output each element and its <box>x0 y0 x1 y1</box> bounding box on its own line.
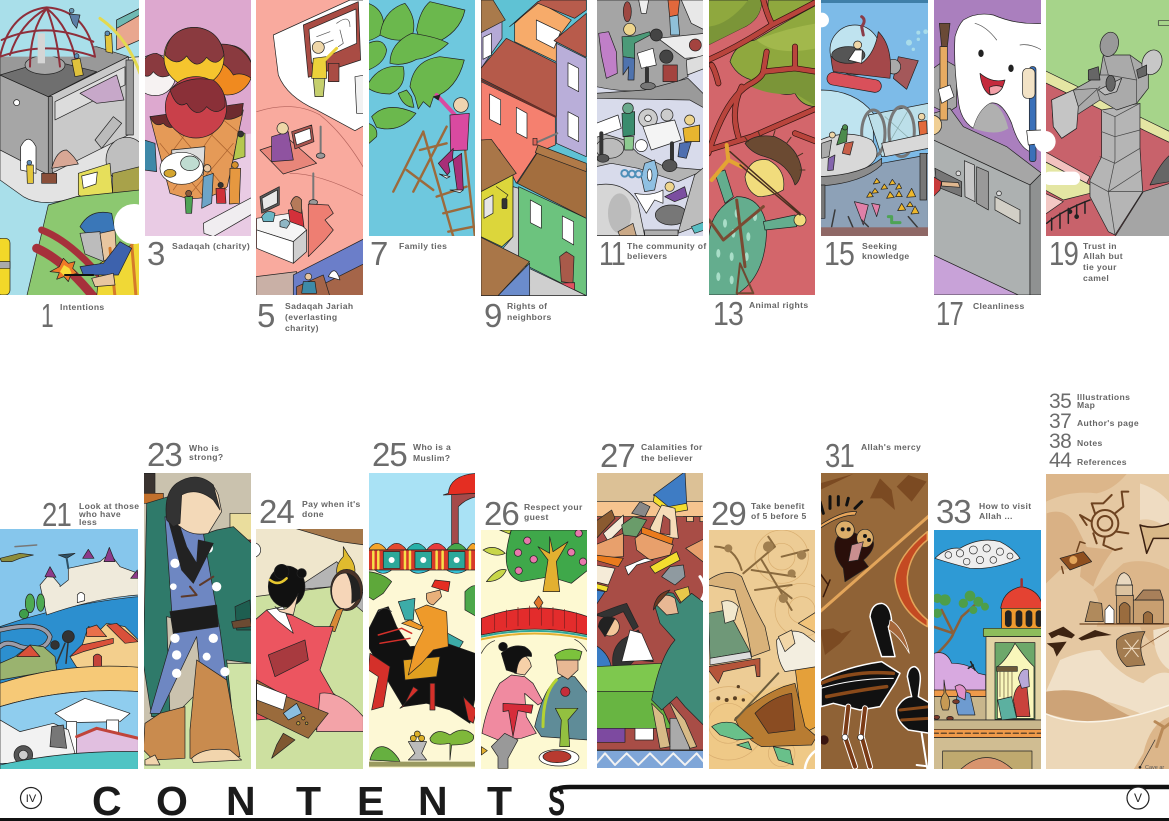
label: Respect your <box>524 502 583 512</box>
caption on map: Cave ar <box>1145 765 1164 771</box>
label: Illustrations <box>1077 392 1130 402</box>
panel: 11 The community of believers <box>596 0 707 272</box>
label: Who is <box>189 443 219 453</box>
panel: 24 Pay when it's done <box>246 493 365 770</box>
page number 21: 21 <box>42 496 71 533</box>
illustration: colourful houses <box>481 0 587 296</box>
label: How to visit <box>979 501 1031 511</box>
illustration: Mughal horseman <box>369 473 475 768</box>
bottom edge line <box>0 818 1169 821</box>
label: camel <box>1083 273 1109 283</box>
page number 23: 23 <box>147 436 182 473</box>
panel: 27 Calamities for the believer <box>595 437 705 770</box>
panel: 17 Cleanliness <box>922 0 1056 332</box>
panel: 23 Who is strong? <box>143 436 252 770</box>
label: Allah ... <box>979 511 1013 521</box>
label: The community of <box>627 241 707 251</box>
panel: 35 Illustrations map <box>1040 390 1169 771</box>
page number 19: 19 <box>1049 235 1078 272</box>
label: Allah but <box>1083 251 1123 261</box>
panel: 19 Trust in Allah but tie your camel <box>1034 0 1169 283</box>
label: Author's page <box>1077 418 1139 428</box>
label: Take benefit <box>751 501 805 511</box>
illustration: robotic camel statue <box>1046 0 1169 236</box>
page number 38: 38 <box>1049 430 1071 453</box>
page number 11: 11 <box>599 235 625 272</box>
label: Seeking <box>862 241 897 251</box>
label: Who is a <box>413 442 451 452</box>
panel: 5 Sadaqah Jariah <box>256 0 365 334</box>
label: Sadaqah (charity) <box>172 241 250 251</box>
page number 25: 25 <box>372 436 407 473</box>
label: believers <box>627 251 667 261</box>
label: who have <box>78 509 121 519</box>
label: Map <box>1077 400 1095 410</box>
page number 26: 26 <box>484 495 519 532</box>
illustration: seated couple under red awning <box>481 530 587 769</box>
label: neighbors <box>507 312 552 322</box>
page number 3: 3 <box>147 235 164 272</box>
page number 44: 44 <box>1049 449 1072 472</box>
page number 7: 7 <box>370 235 387 272</box>
label: Trust in <box>1083 241 1117 251</box>
label: done <box>302 509 324 519</box>
illustration: mosque construction and welder <box>0 0 139 295</box>
page marker right: V <box>1134 791 1142 805</box>
panel: 13 Animal rights <box>708 0 817 332</box>
page number 35: 35 <box>1049 390 1071 413</box>
illustration: man in kimono <box>144 473 251 769</box>
label: Family ties <box>399 241 447 251</box>
label: Rights of <box>507 301 547 311</box>
label: Animal rights <box>749 300 808 310</box>
label: of 5 before 5 <box>751 511 807 521</box>
page marker left: IV <box>26 793 37 805</box>
panel: 29 Take benefit of 5 before 5 <box>692 495 828 770</box>
footer band <box>0 778 1169 821</box>
illustration: collapsing tower and people <box>597 473 703 768</box>
panel: 3 Sadaqah (charity) <box>134 0 253 272</box>
label: Allah's mercy <box>861 442 921 452</box>
illustration: sepia map with cave art <box>1046 474 1169 769</box>
illustration: ice cream cone shop <box>145 0 251 236</box>
label: Look at those <box>79 501 139 511</box>
panel: 15 Seeking knowledge <box>814 0 928 272</box>
illustration: submarine and undersea habitat <box>821 0 928 236</box>
page number 9: 9 <box>484 297 501 334</box>
illustration: old men, tree and tortoise <box>709 530 815 769</box>
panel: 7 Family ties <box>368 0 477 272</box>
page number 13: 13 <box>713 295 743 332</box>
page number 15: 15 <box>824 235 854 272</box>
label: Pay when it's <box>302 499 361 509</box>
page number 17: 17 <box>936 295 963 332</box>
illustration: castle, town and villa <box>0 529 138 769</box>
label: Intentions <box>60 302 105 312</box>
page number 31: 31 <box>825 437 854 474</box>
label: strong? <box>189 452 223 462</box>
label: (everlasting <box>285 312 337 322</box>
page number 33: 33 <box>936 493 971 530</box>
label: tie your <box>1083 262 1117 272</box>
page marker right <box>1127 787 1149 809</box>
illustration: rock-art birds on brown ground <box>821 473 928 769</box>
illustration: person on ladder cutting leaves <box>369 0 475 236</box>
panel: 33 How to visit Allah <box>933 493 1042 770</box>
label: charity) <box>285 323 319 333</box>
page number 1: 1 <box>41 297 53 334</box>
page number 5: 5 <box>257 297 274 334</box>
panel: 1 Intentions <box>0 0 154 334</box>
illustration: futuristic laboratory <box>597 0 703 236</box>
page number 37: 37 <box>1049 410 1071 433</box>
label: References <box>1077 457 1127 467</box>
panel: 21 Look at those who have less <box>0 496 139 770</box>
page number 27: 27 <box>600 437 635 474</box>
label: knowledge <box>862 251 910 261</box>
label: Sadaqah Jariah <box>285 301 353 311</box>
panel: 9 Rights of neighbors <box>478 0 591 334</box>
illustration: boy with slingshot under a tree <box>709 0 815 295</box>
illustration: domed building and cloud <box>934 530 1041 769</box>
panel: 25 Who is a Muslim? <box>368 436 477 768</box>
label: the believer <box>641 453 693 463</box>
panel: 31 Allah's mercy <box>819 437 930 770</box>
illustration: isometric learning centre <box>256 0 363 295</box>
label: Cleanliness <box>973 301 1025 311</box>
page number 29: 29 <box>711 495 746 532</box>
page marker left <box>20 788 42 808</box>
label: Notes <box>1077 438 1103 448</box>
panel: 26 Respect your guest <box>478 495 591 772</box>
label: Calamities for <box>641 442 703 452</box>
white notch between panels <box>1034 132 1056 152</box>
illustration: woman with mirror <box>256 529 363 769</box>
label: guest <box>524 512 549 522</box>
label: Muslim? <box>413 453 450 463</box>
page number 24: 24 <box>259 493 294 530</box>
label: less <box>79 517 97 527</box>
rule from title to page edge <box>554 787 1169 792</box>
illustration: smiling tooth on machine <box>934 0 1041 295</box>
